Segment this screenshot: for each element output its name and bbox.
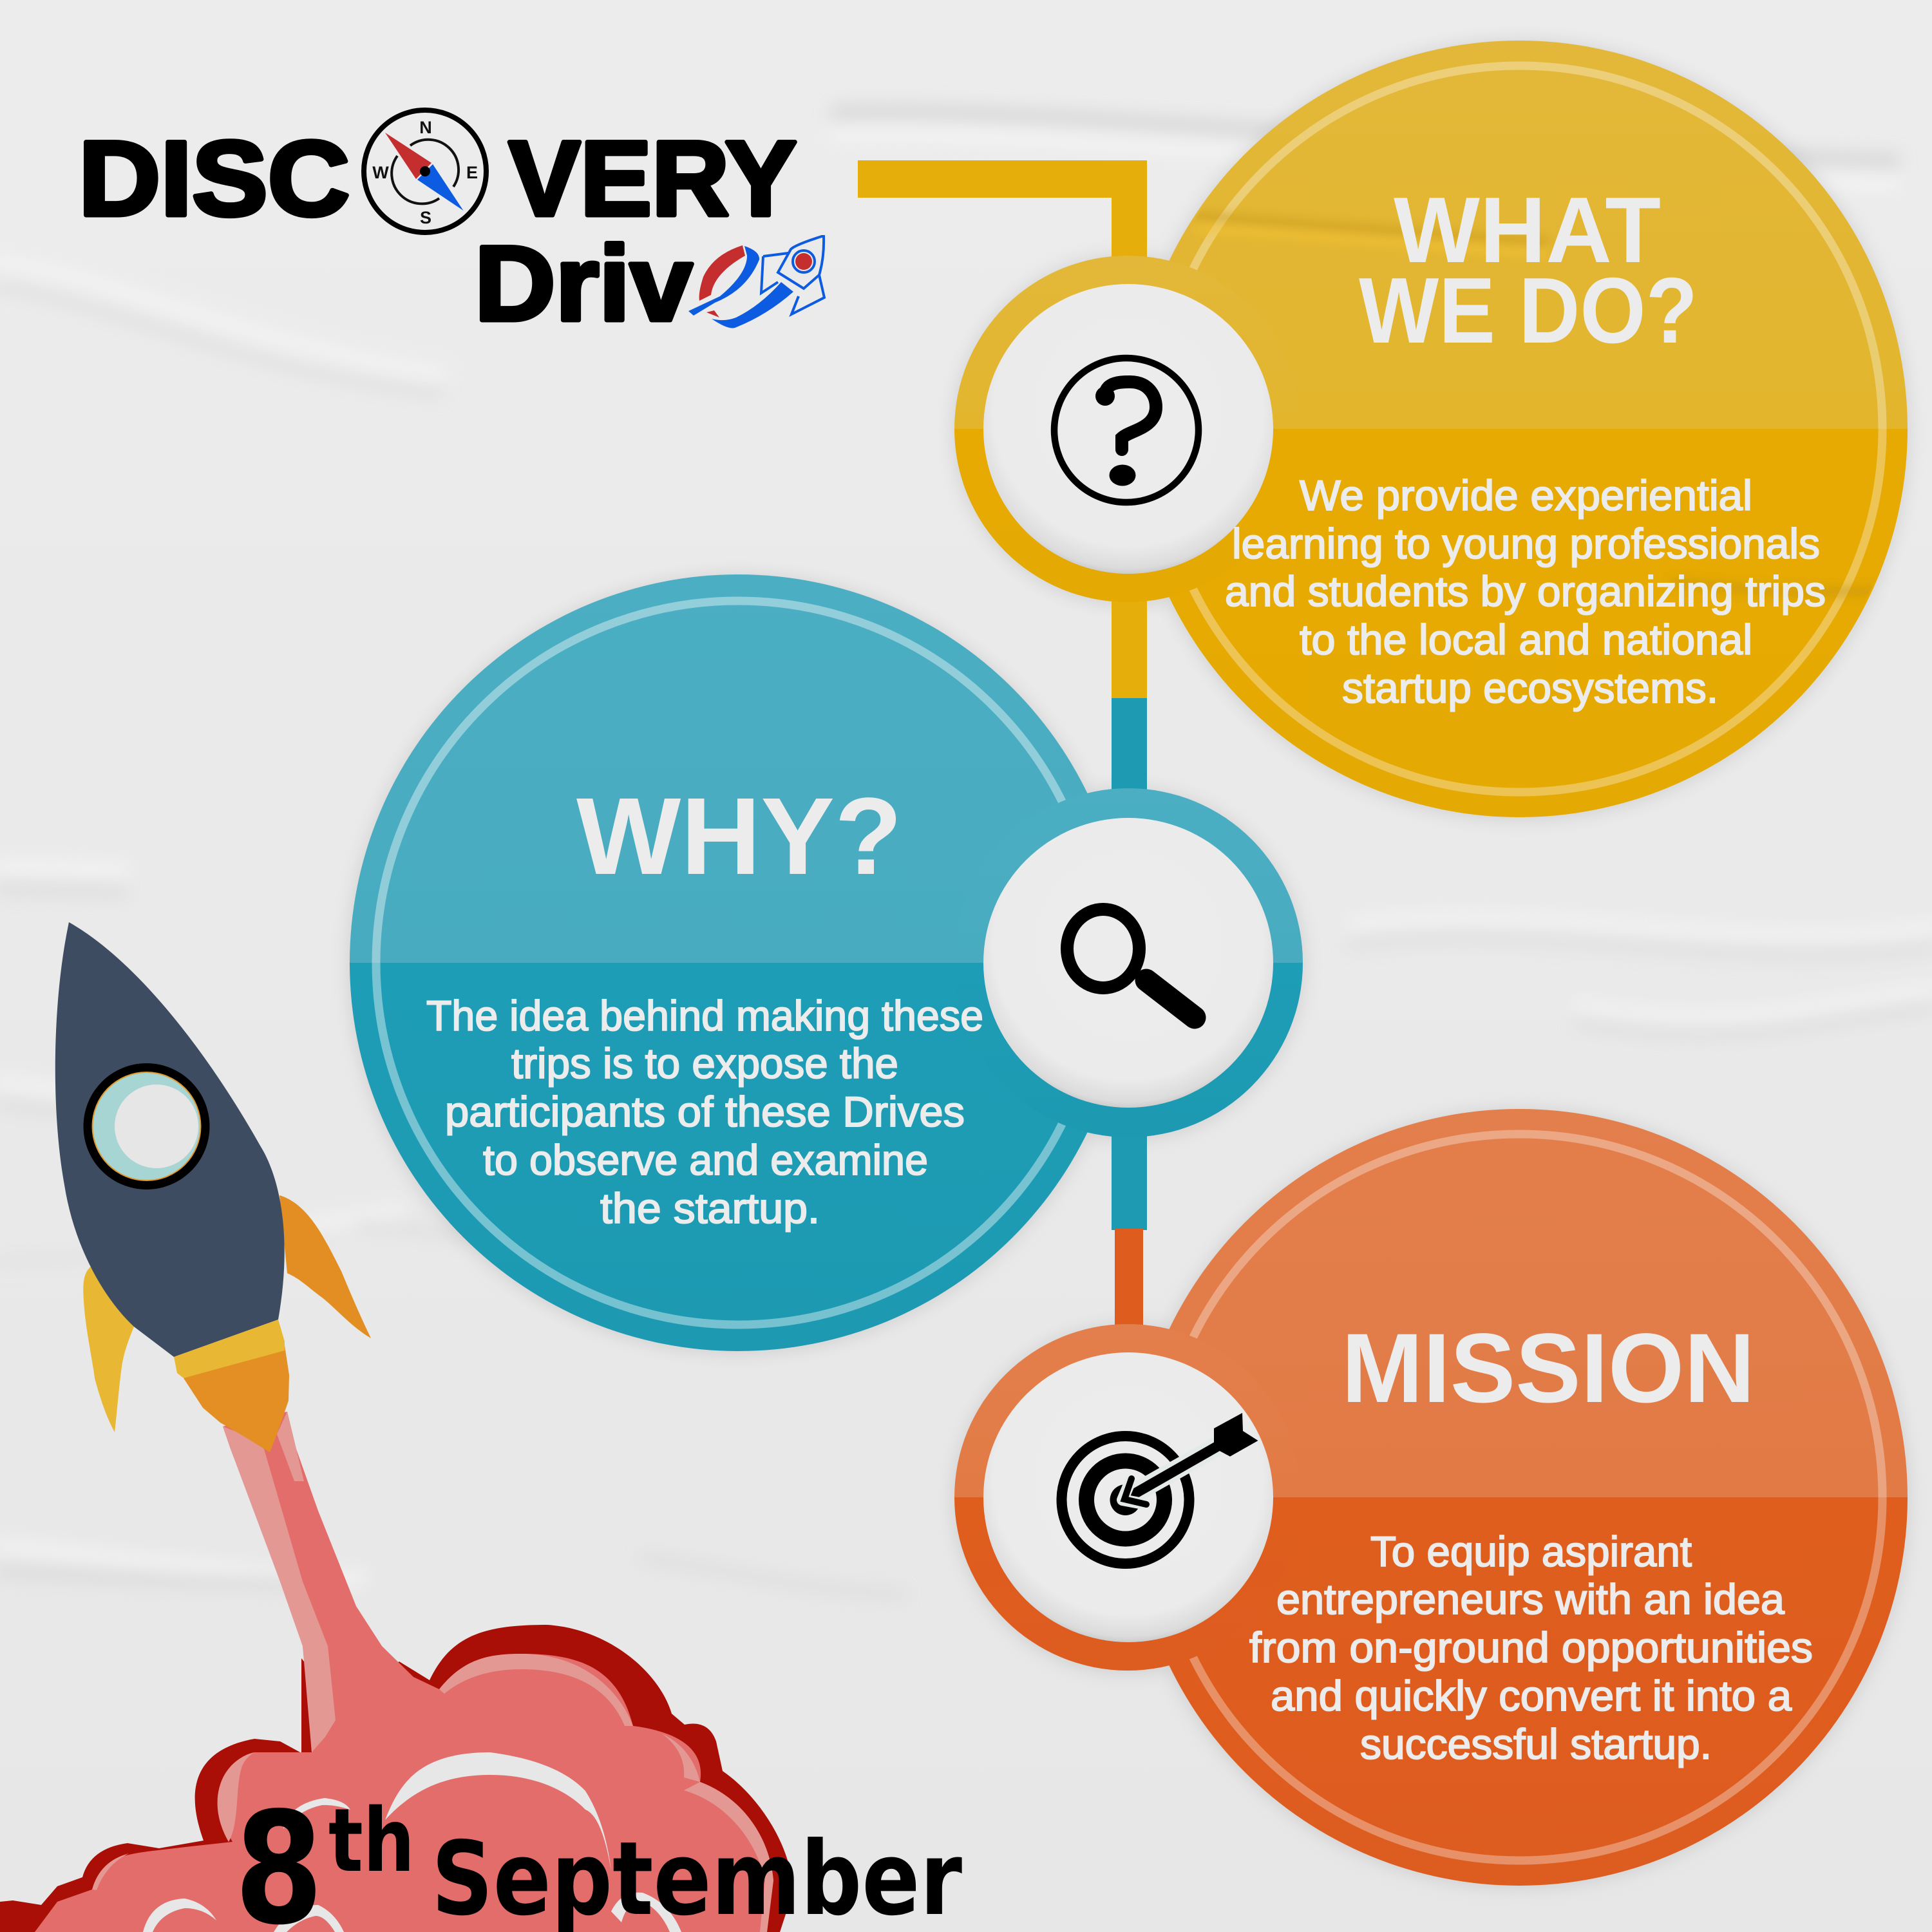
heading: what we do: WHAT <box>1394 178 1661 282</box>
big orange circle <box>1131 1109 1908 1886</box>
text: mission body: and quickly convert it into a <box>1271 1672 1792 1719</box>
heading: why: WHY? <box>576 775 902 898</box>
text: what we do body <box>1225 471 1826 712</box>
icon: question mark <box>1054 358 1198 502</box>
icon: compass <box>364 110 486 232</box>
icon: compass: E <box>466 163 478 182</box>
white disc <box>983 1352 1273 1642</box>
connector: teal <box>1112 698 1147 1230</box>
icon: compass: S <box>420 208 431 227</box>
text: what we do body: and students by organizing trips <box>1225 567 1826 615</box>
connector: yellow bracket <box>858 160 1147 699</box>
icon: compass: N <box>419 118 432 137</box>
heading: mission: MISSION <box>1341 1313 1755 1423</box>
text: what we do body: learning to young professionals <box>1232 520 1820 567</box>
connector: orange <box>1115 1229 1143 1332</box>
panel: mission <box>954 1109 1908 1886</box>
logo: Discovery Drive <box>79 110 824 343</box>
date: 8th September <box>234 1779 962 1932</box>
illustration: rocket <box>55 922 371 1452</box>
text: why body: to observe and examine <box>483 1136 928 1184</box>
icon: compass: W <box>372 163 389 182</box>
cloud highlights <box>439 1654 633 1726</box>
heading: what we do: WE DO? <box>1359 258 1698 363</box>
icon: target and arrow <box>1061 1413 1258 1564</box>
big yellow circle <box>1131 41 1908 817</box>
illustration: exhaust cloud <box>0 1412 793 1932</box>
cloud crescents <box>143 1752 681 1932</box>
cloud body and exhaust plume <box>35 1412 773 1932</box>
small orange ring <box>954 1324 1301 1671</box>
inner ring <box>1156 66 1882 792</box>
rocket right fin <box>279 1195 371 1338</box>
text: mission body: successful startup. <box>1360 1720 1712 1768</box>
white disc <box>983 284 1273 574</box>
icon: magnifier <box>1067 909 1195 1018</box>
text: why body: the startup. <box>600 1184 820 1232</box>
text: why body: trips is to expose the <box>511 1039 898 1087</box>
paper wrinkles across yellow circle <box>1198 216 1900 592</box>
small teal ring <box>954 788 1303 1137</box>
text: what we do body: to the local and national <box>1300 616 1752 663</box>
date: 8th September: th <box>328 1790 415 1892</box>
inner ring <box>376 601 1100 1325</box>
text: what we do body: We provide experiential <box>1300 471 1752 519</box>
logo word: Driv: Driv <box>475 224 692 343</box>
plume highlights <box>223 1426 336 1752</box>
rocket left fin <box>83 1265 134 1432</box>
big teal circle <box>350 574 1126 1351</box>
text: mission body: To equip aspirant <box>1370 1528 1692 1575</box>
heading: what we do <box>1359 178 1698 363</box>
text: mission body: entrepreneurs with an idea <box>1276 1575 1785 1623</box>
icon: logo rocket <box>688 236 824 328</box>
text: why body: participants of these Drives <box>445 1088 965 1135</box>
rocket flame <box>184 1345 289 1452</box>
text: why body <box>426 992 983 1232</box>
small yellow ring <box>954 256 1301 602</box>
cloud outline <box>0 1625 793 1932</box>
logo word: DISC: DISC <box>79 119 350 238</box>
white disc <box>983 818 1273 1108</box>
panel: why <box>350 574 1303 1351</box>
rocket engine band <box>174 1320 285 1378</box>
logo word: VERY: VERY <box>509 119 797 238</box>
text: mission body <box>1249 1528 1813 1768</box>
text: why body: The idea behind making these <box>426 992 983 1039</box>
panel: what we do <box>954 41 1908 817</box>
text: mission body: from on-ground opportunities <box>1249 1624 1813 1671</box>
soft shadows under circles <box>349 41 1908 1888</box>
rocket body <box>55 922 285 1357</box>
rocket window <box>84 1063 210 1189</box>
text: what we do body: startup ecosystems. <box>1342 664 1718 712</box>
inner ring <box>1156 1134 1882 1861</box>
